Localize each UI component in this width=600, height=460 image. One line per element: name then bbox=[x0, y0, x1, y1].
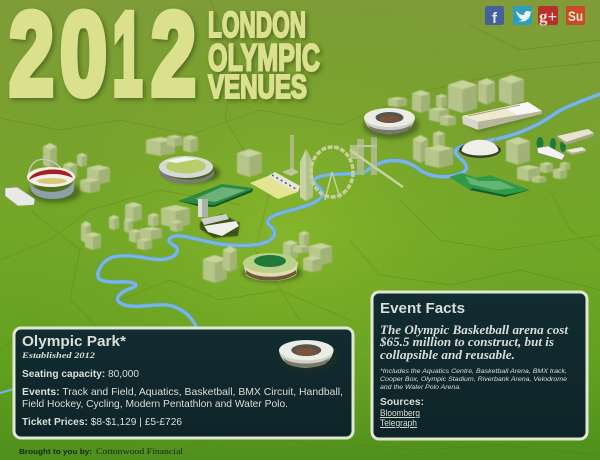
credit line: Brought to you by: bbox=[19, 447, 92, 456]
venue: Earls Court and tower bbox=[198, 199, 240, 238]
river thames bbox=[0, 94, 600, 393]
venue: Aquatics and Basketball buildings bbox=[462, 102, 542, 132]
icon: facebook: f bbox=[492, 10, 498, 27]
landmark: Big Ben bbox=[300, 149, 313, 201]
venue: O2 Arena dome bbox=[459, 133, 501, 158]
text: sources: Telegraph bbox=[380, 418, 417, 429]
icon: google plus: g+ bbox=[539, 7, 557, 26]
text: footnote: and the Water Polo Arena. bbox=[380, 384, 461, 391]
title: London Olympic Venues bbox=[208, 4, 320, 105]
subheading: established: Established 2012 bbox=[21, 351, 95, 360]
text: events bbox=[22, 386, 343, 410]
panel: Event Facts bbox=[372, 292, 587, 439]
text: seating capacity: Seating capacity: 80,000 bbox=[22, 368, 139, 380]
landmark: London Eye bbox=[311, 147, 353, 200]
title: London Olympic Venues: LONDON bbox=[208, 4, 306, 45]
text: basketball arena fact bbox=[379, 323, 569, 362]
landmark: Tower Bridge bbox=[350, 137, 403, 187]
venue: Greenwich Park green bbox=[449, 173, 530, 197]
heading: Event Facts: Event Facts bbox=[380, 300, 465, 317]
text: events: Events: Track and Field, Aquatics, Basketball, BMX Circuit, Handball, bbox=[22, 386, 343, 398]
text: events: Field Hockey, Cycling, Modern Pentathlon and Water Polo. bbox=[22, 398, 288, 410]
venue: Wembley stadium bbox=[5, 159, 81, 206]
title: London Olympic Venues: VENUES bbox=[208, 68, 307, 105]
venue: Greenwich and Royal Artillery buildings bbox=[536, 129, 594, 160]
venue: Lord's cricket ground bbox=[159, 156, 220, 184]
text: basketball arena fact: $65.5 million to construct, but is bbox=[379, 335, 554, 349]
title: London Olympic Venues: OLYMPIC bbox=[208, 38, 320, 80]
landmark: Nelson column bbox=[282, 135, 299, 176]
text: basketball arena fact: The Olympic Basketball arena cost bbox=[380, 323, 569, 337]
venue: Wimbledon bbox=[242, 253, 302, 282]
text: ticket prices: Ticket Prices: $8-$1,129 | £5-£726 bbox=[22, 416, 182, 428]
text: sources: Sources: bbox=[380, 396, 424, 408]
text: basketball arena fact: collapsible and reusable. bbox=[380, 348, 515, 362]
text: footnote: *Includes the Aquatics Centre, Basketball Arena, BMX track, bbox=[380, 368, 567, 375]
text: sources bbox=[380, 396, 424, 429]
text: footnote bbox=[380, 368, 567, 391]
building clusters bbox=[43, 75, 570, 283]
text: sources: Bloomberg bbox=[380, 408, 420, 419]
venue: Horse Guards Parade bbox=[250, 172, 300, 199]
credit line bbox=[19, 446, 184, 456]
icon: stumbleupon: Su bbox=[568, 8, 583, 24]
venue: Hyde Park green bbox=[178, 184, 253, 207]
social icons bbox=[485, 6, 585, 27]
venue: Olympic Stadium bbox=[363, 108, 419, 139]
title: 2012 bbox=[9, 0, 196, 120]
credit line: Cottonwood Financial bbox=[96, 446, 184, 456]
heading: Olympic Park: Olympic Park* bbox=[22, 334, 126, 350]
text: footnote: Cooper Box, Olympic Stadium, Riverbank Arena, Velodrome bbox=[380, 376, 567, 383]
icon: stadium bbox=[278, 340, 338, 373]
panel: Olympic Park bbox=[14, 328, 353, 438]
icon: twitter bbox=[513, 6, 532, 25]
